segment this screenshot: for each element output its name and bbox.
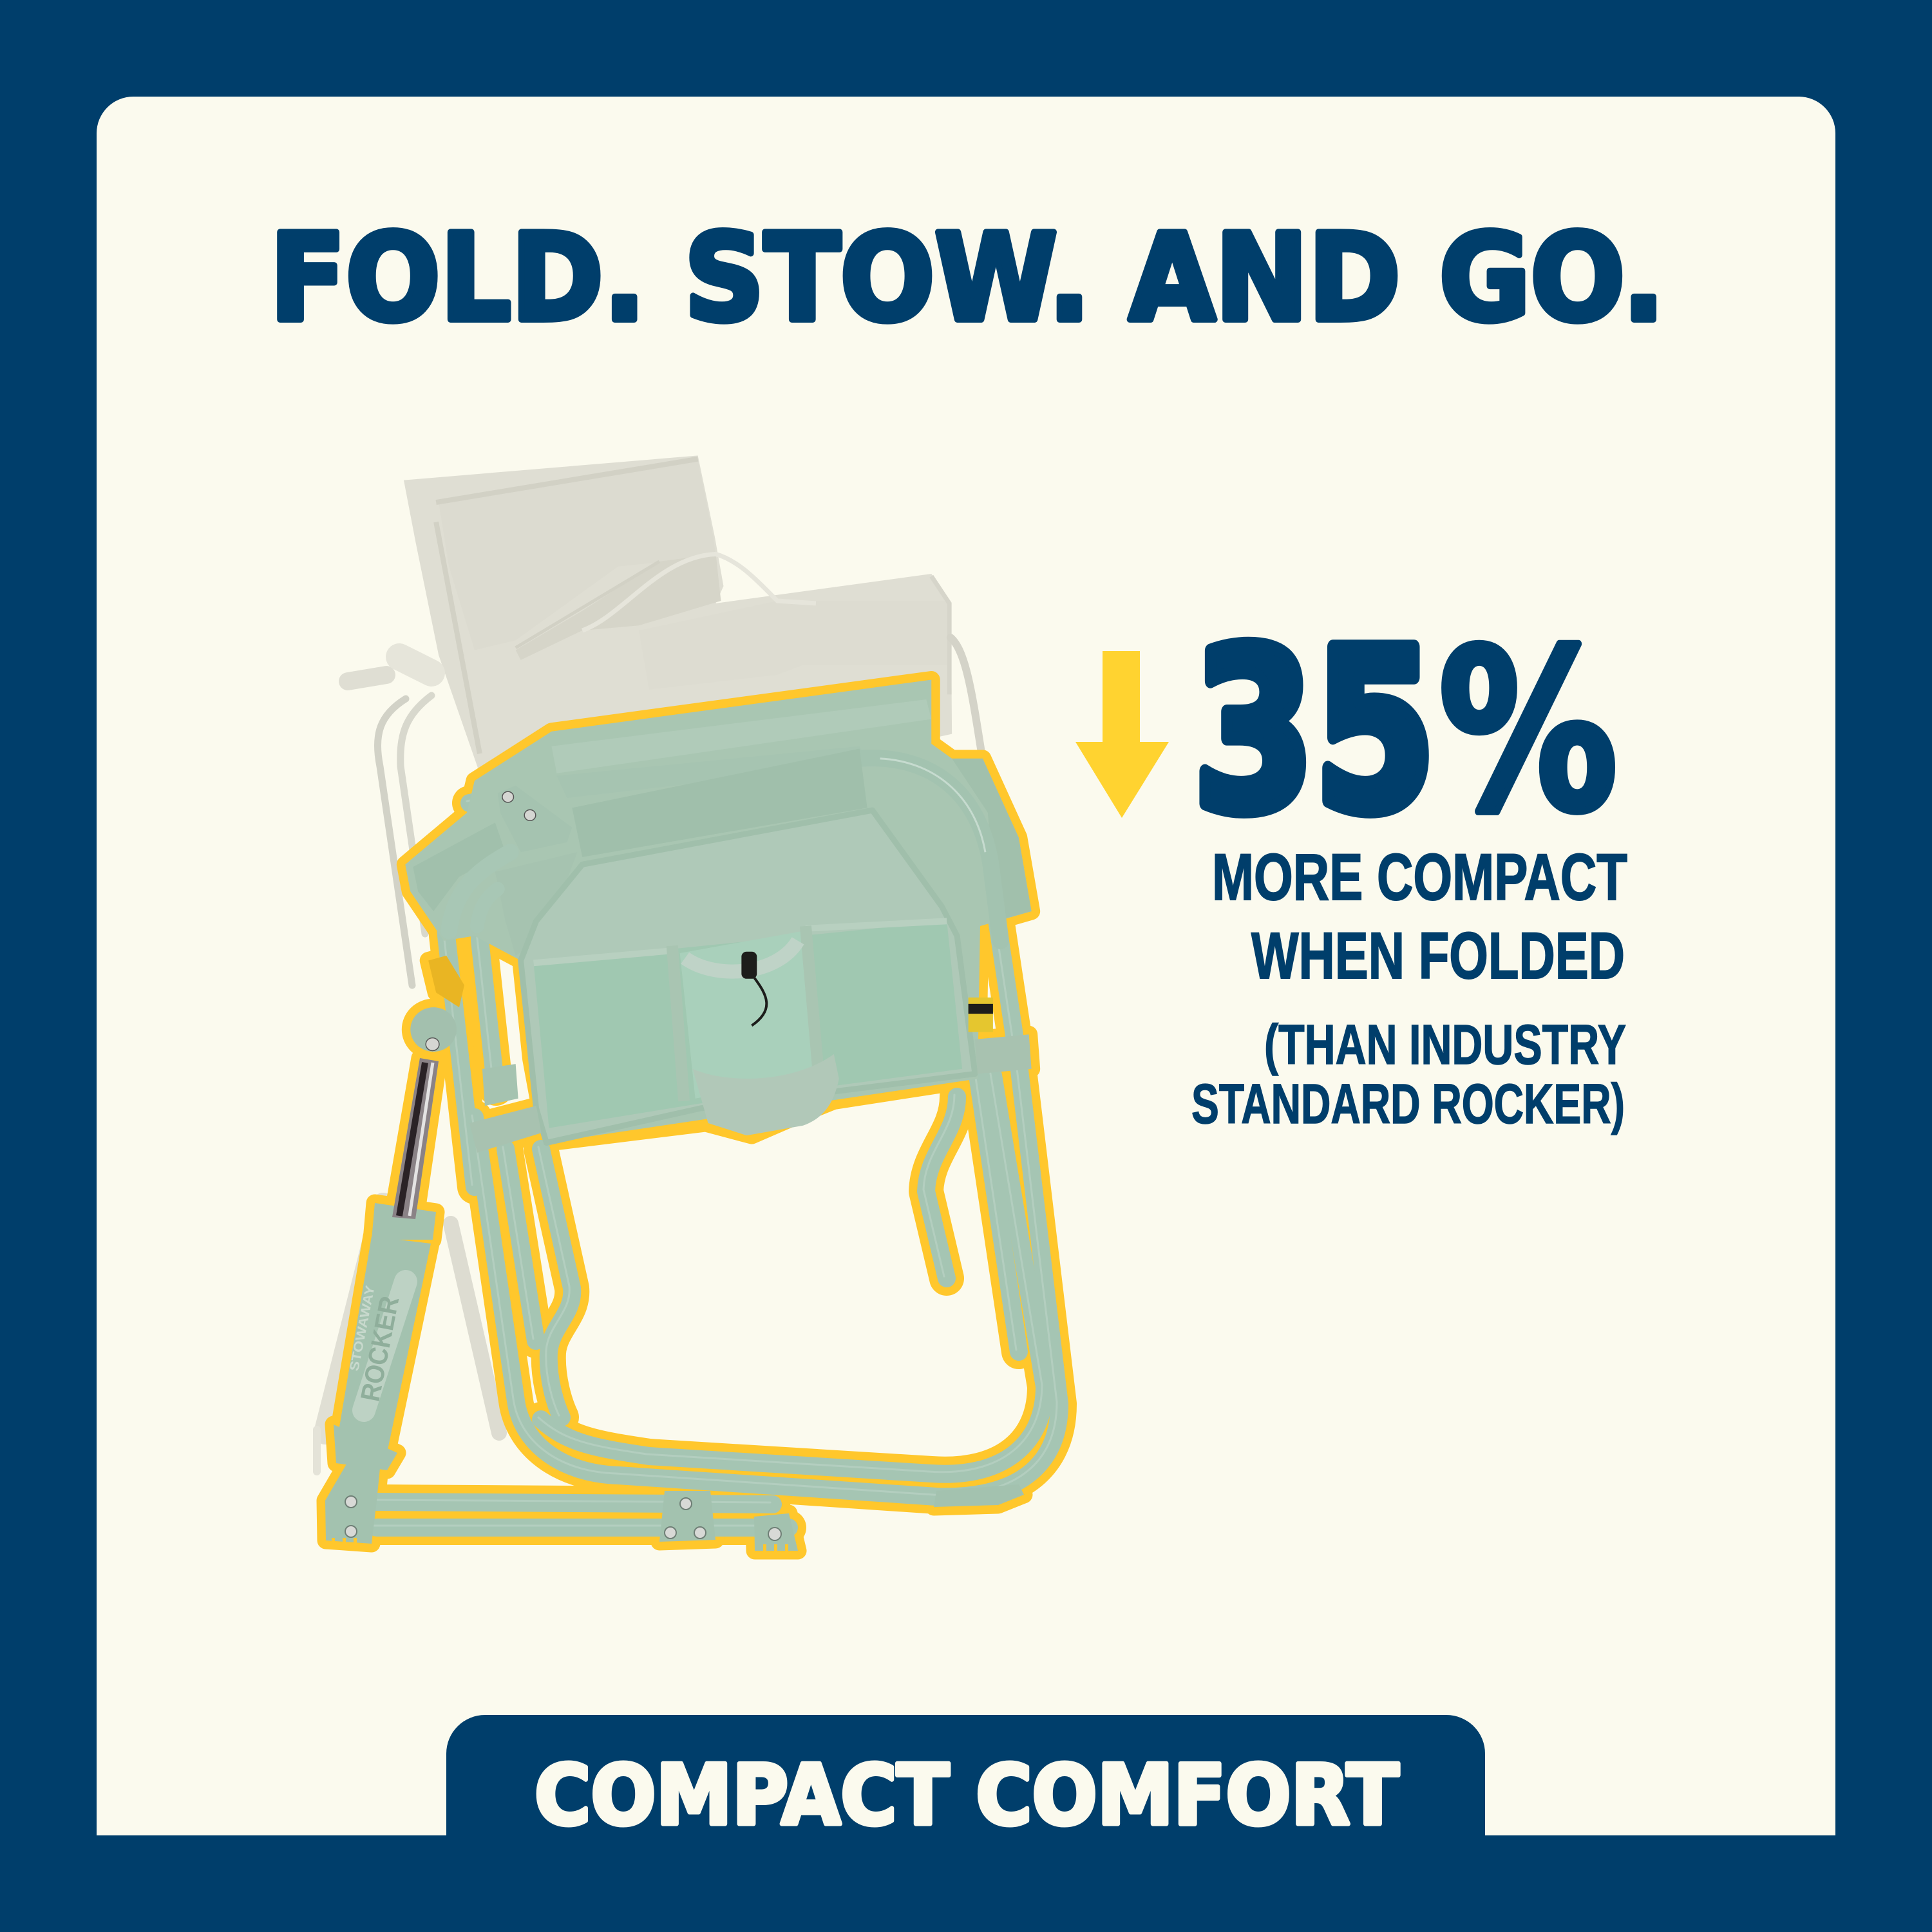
title: FOLD. STOW. AND GO. [270,208,1665,348]
ghost handle and tubes [317,638,982,1472]
chair illustration: full-size ghost and compact folded chair [317,455,1059,1551]
right arc of frame over bundle [860,758,1001,941]
mesh pockets [534,921,962,1128]
caution label [969,998,993,1032]
bottom tab [446,1715,1485,1844]
ghost outline of the larger standard chair [317,455,982,1472]
stat description: STANDARD ROCKER) [1191,1073,1625,1135]
straps [469,1106,542,1153]
stat description: MORE COMPACT [1212,840,1627,914]
stat description: WHEN FOLDED [1251,919,1625,992]
stat: 35%: 35 [1193,603,1435,861]
down arrow [1075,651,1169,818]
bolts [345,1496,781,1540]
foot grips [332,1538,788,1551]
pouch [521,810,975,1143]
cylinder label: ROCKER: ROCKER [355,1294,404,1404]
stat description [1191,840,1627,1135]
stat: 35%: % [1439,603,1618,861]
fabric bundle [405,679,1032,1143]
rocker mechanism: cylinder, rod, base [325,1058,1024,1551]
cup pocket [693,1054,839,1135]
upper flap [572,749,867,857]
hinge plate [498,786,572,852]
drawstring toggle and cord [741,952,766,1025]
chrome rod [392,1058,439,1219]
folded fabric seat and organizer pouch [405,679,1032,1153]
yellow outline [325,679,1059,1551]
stat description: (THAN INDUSTRY [1264,1014,1626,1076]
cylinder label: STOWAWAY: STOWAWAY [347,1283,378,1372]
folded chair frame tubes [374,757,1059,1528]
pivot hub and yellow tag [410,1007,457,1052]
tab label: COMPACT COMFORT [535,1748,1399,1844]
cylinder logo pill [364,1282,406,1410]
